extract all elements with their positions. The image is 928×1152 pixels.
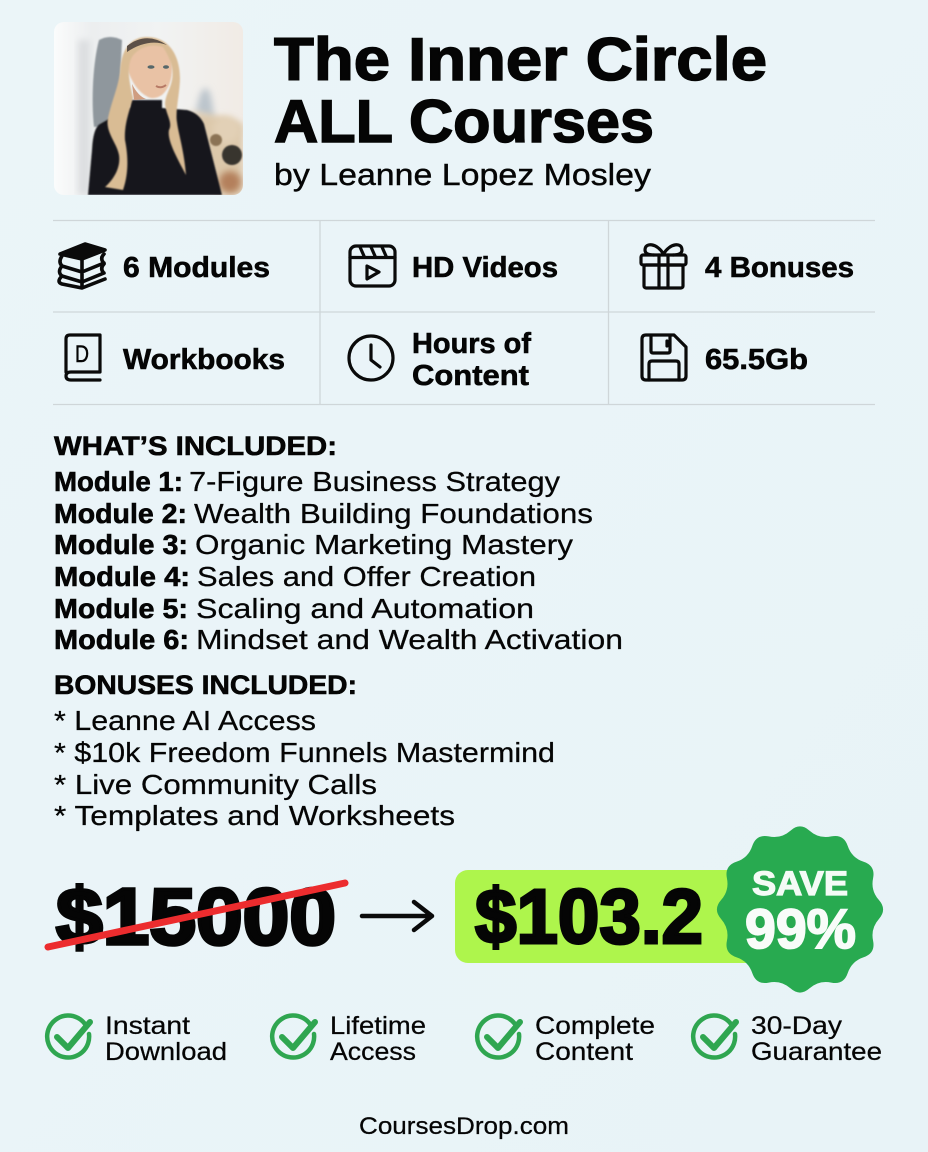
guarantee: Instant Download: Download: [105, 1038, 227, 1066]
bonus list: * Live Community Calls: [54, 769, 377, 800]
feature: Hours of Content: Hours of: [412, 328, 531, 360]
feature: 6 Modules: 6 Modules: [123, 252, 270, 284]
module 5: Scaling and Automation: [196, 593, 534, 624]
guarantee: Instant Download: [47, 1012, 227, 1066]
module 3: [54, 529, 573, 560]
icon: clock: [349, 336, 393, 380]
feature grid: [53, 220, 875, 404]
feature: Workbooks: Workbooks: [123, 344, 285, 376]
module 2: [54, 498, 593, 529]
module 6: [54, 624, 623, 655]
guarantee: 30-Day Guarantee: Guarantee: [751, 1038, 882, 1066]
module 2: Module 2:: [54, 498, 187, 529]
bonus list: * Leanne AI Access: [54, 705, 316, 736]
feature: HD Videos: HD Videos: [412, 252, 558, 284]
icon: floppy disk: [642, 335, 686, 380]
icon: gift: [641, 245, 686, 288]
icon: green check: [47, 1016, 90, 1058]
save badge: SAVE: [752, 865, 848, 903]
module list: [54, 466, 623, 655]
title: ALL Courses: [274, 88, 654, 155]
feature: HD Videos: [350, 246, 558, 286]
module 4: [54, 561, 536, 592]
module 4: Module 4:: [54, 561, 190, 592]
feature: 4 Bonuses: 4 Bonuses: [705, 252, 854, 284]
icon: workbook: [66, 335, 100, 380]
module 3: Organic Marketing Mastery: [195, 529, 573, 560]
new price box: $103.2: [475, 874, 703, 960]
guarantee: Complete Content: Complete: [535, 1012, 655, 1040]
module 1: [54, 466, 560, 497]
photo: portrait of Leanne: [54, 22, 243, 195]
feature: Hours of Content: [349, 328, 531, 392]
guarantee: Complete Content: Content: [535, 1038, 633, 1066]
module 6: Mindset and Wealth Activation: [196, 624, 623, 655]
bonus list: [54, 705, 555, 831]
guarantee: Instant Download: Instant: [105, 1012, 190, 1040]
guarantee: Lifetime Access: [272, 1012, 426, 1066]
guarantee: Lifetime Access: Access: [330, 1038, 416, 1066]
feature: 6 Modules: [59, 244, 270, 288]
old price, struck through: $15000: [56, 872, 336, 961]
icon: books: [59, 244, 105, 288]
module 5: [54, 593, 534, 624]
title: [274, 26, 767, 155]
guarantee: 30-Day Guarantee: 30-Day: [751, 1012, 843, 1040]
feature: 65.5Gb: [642, 335, 808, 380]
icon: video clapper: [350, 246, 395, 286]
guarantee: Lifetime Access: Lifetime: [330, 1012, 426, 1040]
feature: 65.5Gb: 65.5Gb: [705, 344, 808, 376]
heading: what's included: WHAT’S INCLUDED:: [54, 431, 337, 461]
icon: green check: [272, 1016, 315, 1058]
module 4: Sales and Offer Creation: [197, 561, 536, 592]
feature: Hours of Content: Content: [412, 360, 529, 392]
feature: Workbooks: [66, 335, 285, 380]
module 1: 7-Figure Business Strategy: [189, 466, 560, 497]
module 5: Module 5:: [54, 593, 188, 624]
icon: workbook: D: [75, 341, 89, 368]
guarantee: Complete Content: [477, 1012, 655, 1066]
guarantee: 30-Day Guarantee: [693, 1012, 882, 1066]
new price box: [455, 870, 775, 963]
module 2: Wealth Building Foundations: [194, 498, 593, 529]
bonus list: * $10k Freedom Funnels Mastermind: [54, 737, 555, 768]
arrow: [362, 902, 432, 930]
module 6: Module 6:: [54, 624, 189, 655]
title: The Inner Circle: [274, 26, 767, 93]
footer website: CoursesDrop.com: [359, 1113, 569, 1140]
subtitle: by Leanne Lopez Mosley: [274, 157, 652, 192]
module 1: Module 1:: [54, 466, 183, 497]
bonus list: * Templates and Worksheets: [54, 800, 455, 831]
icon: green check: [477, 1016, 520, 1058]
module 3: Module 3:: [54, 529, 188, 560]
feature: 4 Bonuses: [641, 245, 854, 288]
heading: bonuses included: BONUSES INCLUDED:: [54, 670, 357, 700]
icon: green check: [693, 1016, 736, 1058]
save badge: [717, 826, 883, 993]
save badge: 99%: [745, 897, 856, 960]
